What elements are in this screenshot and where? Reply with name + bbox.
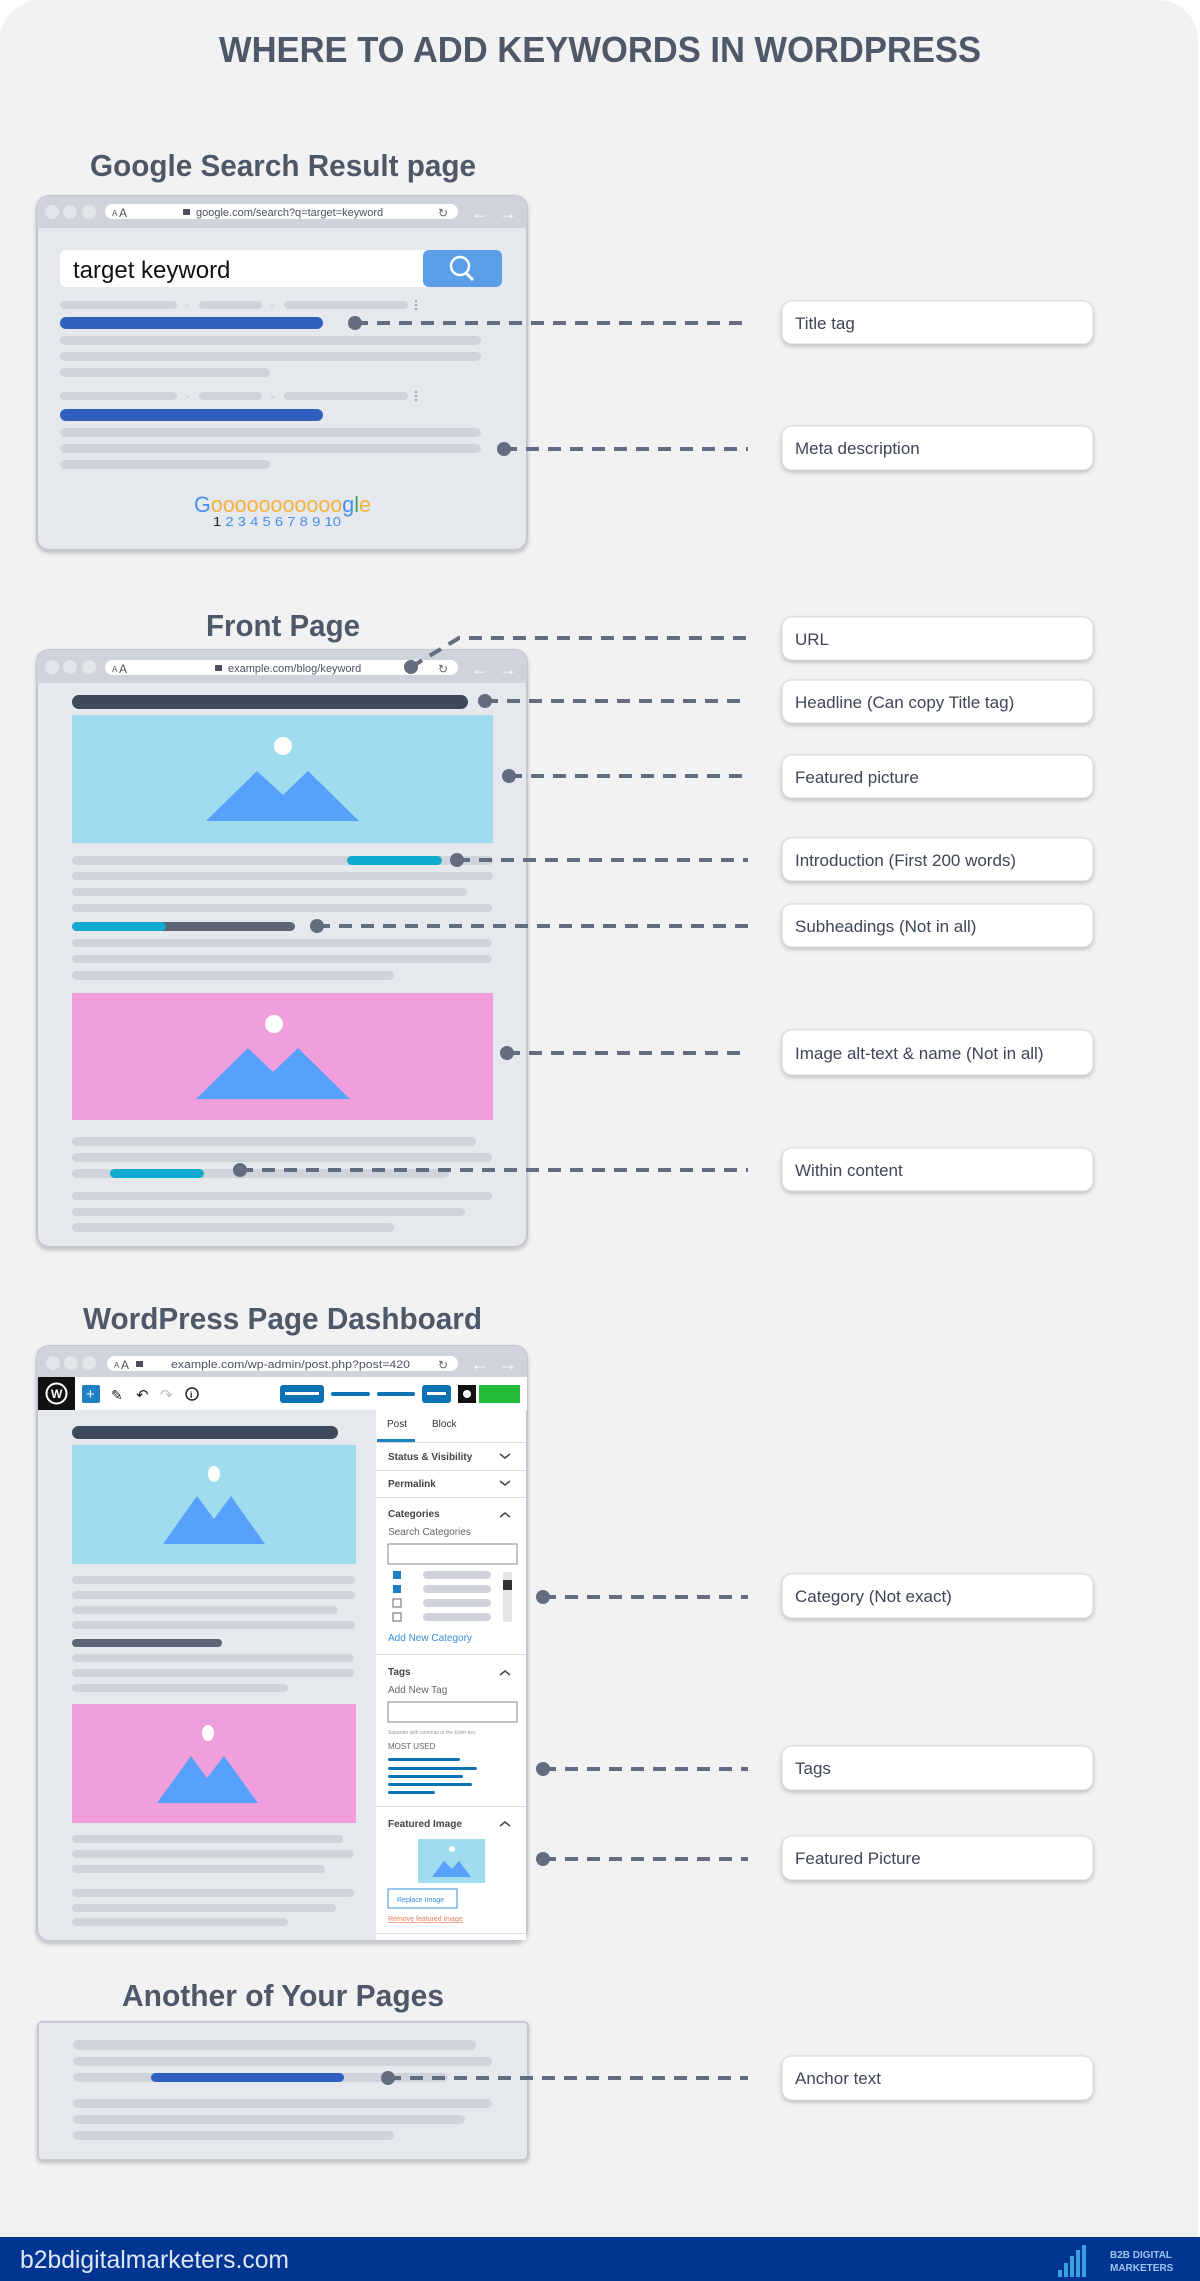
callout: anchor text [782,2056,1093,2100]
callout: URL [782,617,1093,660]
sidebar [376,1410,526,1940]
icon: B2B logo: B2B DIGITAL [1110,2250,1172,2261]
sidebar: Block [432,1419,457,1430]
arrow: image alt-text [500,1046,748,1060]
sidebar: MOST USED [388,1742,436,1751]
callout: tags: Tags [795,1759,831,1778]
arrow: meta description [497,442,748,456]
callout: headline: Headline (Can copy Title tag) [795,693,1014,712]
arrow: subheadings [310,919,748,933]
search box [60,250,502,287]
callout: featured picture: Featured picture [795,768,919,787]
panel: front page browser: A [119,662,127,676]
panel: wordpress dashboard browser: ↻ [438,1358,448,1372]
panel: another page [38,2022,528,2160]
callout: meta description [782,426,1093,470]
arrow: anchor text [381,2071,748,2085]
sidebar: Add New Category [388,1633,472,1644]
image: alt-text picture [72,993,493,1120]
callout: title tag: Title tag [795,314,855,333]
arrow: URL [404,638,748,674]
panel: google search browser: A [112,209,118,218]
toolbar [38,1377,527,1410]
panel: google search browser: ← [471,203,489,223]
image: featured picture [72,715,493,843]
sidebar: Post [387,1419,407,1430]
sidebar: Add New Tag [388,1685,447,1696]
sidebar: Permalink [388,1479,436,1490]
callout: introduction: Introduction (First 200 words) [795,851,1016,870]
heading: WordPress Page Dashboard: WordPress Page Dashboard [83,1301,482,1336]
arrow: headline [478,694,748,708]
panel: front page browser: example.com/blog/keyword [228,663,361,675]
google pagination logo: Gooooooooooogle [194,492,371,517]
arrow: tags [536,1762,748,1776]
toolbar: + [86,1386,95,1403]
arrow: featured picture (dashboard) [536,1852,748,1866]
toolbar: W [51,1387,63,1401]
toolbar: i [190,1390,193,1400]
callout: anchor text: Anchor text [795,2069,881,2088]
callout: featured picture (dashboard) [782,1836,1093,1880]
toolbar: ↷ [160,1387,173,1404]
callout: subheadings [782,904,1093,947]
panel: wordpress dashboard browser [37,1346,527,1941]
panel: google search browser: → [499,203,517,223]
sidebar: Search Categories [388,1527,471,1538]
heading: Another of Your Pages: Another of Your Pages [122,1978,444,2013]
callout: tags [782,1746,1093,1790]
callout: image alt-text [782,1030,1093,1075]
panel: google search browser [37,196,527,550]
sidebar: Remove featured image [388,1916,463,1923]
sidebar: Separate with commas or the Enter key. [388,1730,477,1736]
panel: google search browser: > [270,392,275,402]
callout: within content [782,1148,1093,1191]
panel: front page browser [37,650,527,1247]
callout: URL: URL [795,630,829,649]
editor content [72,1426,356,1926]
sidebar: Replace Image [397,1897,444,1904]
panel: google search browser: A [119,206,127,220]
title: WHERE TO ADD KEYWORDS IN WORDPRESS [219,29,981,70]
panel: wordpress dashboard browser: A [121,1358,129,1372]
arrow: within content [233,1163,748,1177]
callout: featured picture (dashboard): Featured Picture [795,1849,921,1868]
sidebar: Status & Visibility [388,1452,473,1463]
google pagination logo: 1 2 3 4 5 6 7 8 9 10 [213,514,341,529]
panel: front page browser: → [499,659,517,679]
panel: wordpress dashboard browser: A [114,1361,120,1370]
panel: wordpress dashboard browser: → [499,1354,517,1374]
google pagination logo [194,492,371,529]
sidebar: Categories [388,1509,440,1520]
arrow: featured picture [502,769,748,783]
sidebar: Tags [388,1667,411,1678]
panel: google search browser: > [184,301,189,311]
arrow: category [536,1590,748,1604]
panel: wordpress dashboard browser: ← [471,1354,489,1374]
panel: front page browser: A [112,665,118,674]
panel: google search browser: ↻ [438,206,448,220]
callout: headline [782,680,1093,723]
panel: google search browser: google.com/search?q=target=keyword [196,207,383,219]
panel: front page browser: ← [471,659,489,679]
callout: meta description: Meta description [795,439,920,458]
arrow: introduction [450,853,748,867]
icon: B2B logo [1058,2245,1174,2277]
heading: Front Page: Front Page [206,608,360,643]
sidebar: Featured Image [388,1819,462,1830]
icon: B2B logo: MARKETERS [1110,2263,1174,2274]
callout: title tag [782,301,1093,344]
callout: category [782,1574,1093,1618]
search box: target keyword [73,257,230,284]
panel: google search browser: > [270,301,275,311]
callout: image alt-text: Image alt-text & name (Not in all) [795,1044,1043,1063]
panel: wordpress dashboard browser: example.com/wp-admin/post.php?post=420 [171,1359,410,1371]
callout: category: Category (Not exact) [795,1587,952,1606]
arrow: title tag [348,316,748,330]
footer: b2bdigitalmarketers.com [20,2246,289,2274]
callout: within content: Within content [795,1161,903,1180]
callout: featured picture [782,755,1093,798]
toolbar: ↶ [136,1387,149,1404]
callout: subheadings: Subheadings (Not in all) [795,917,976,936]
toolbar: ✎ [111,1387,123,1403]
heading: Google Search Result page: Google Search Result page [90,148,476,183]
panel: google search browser: > [184,392,189,402]
callout: introduction [782,838,1093,881]
panel: front page browser: ↻ [438,662,448,676]
footer [0,2237,1200,2281]
